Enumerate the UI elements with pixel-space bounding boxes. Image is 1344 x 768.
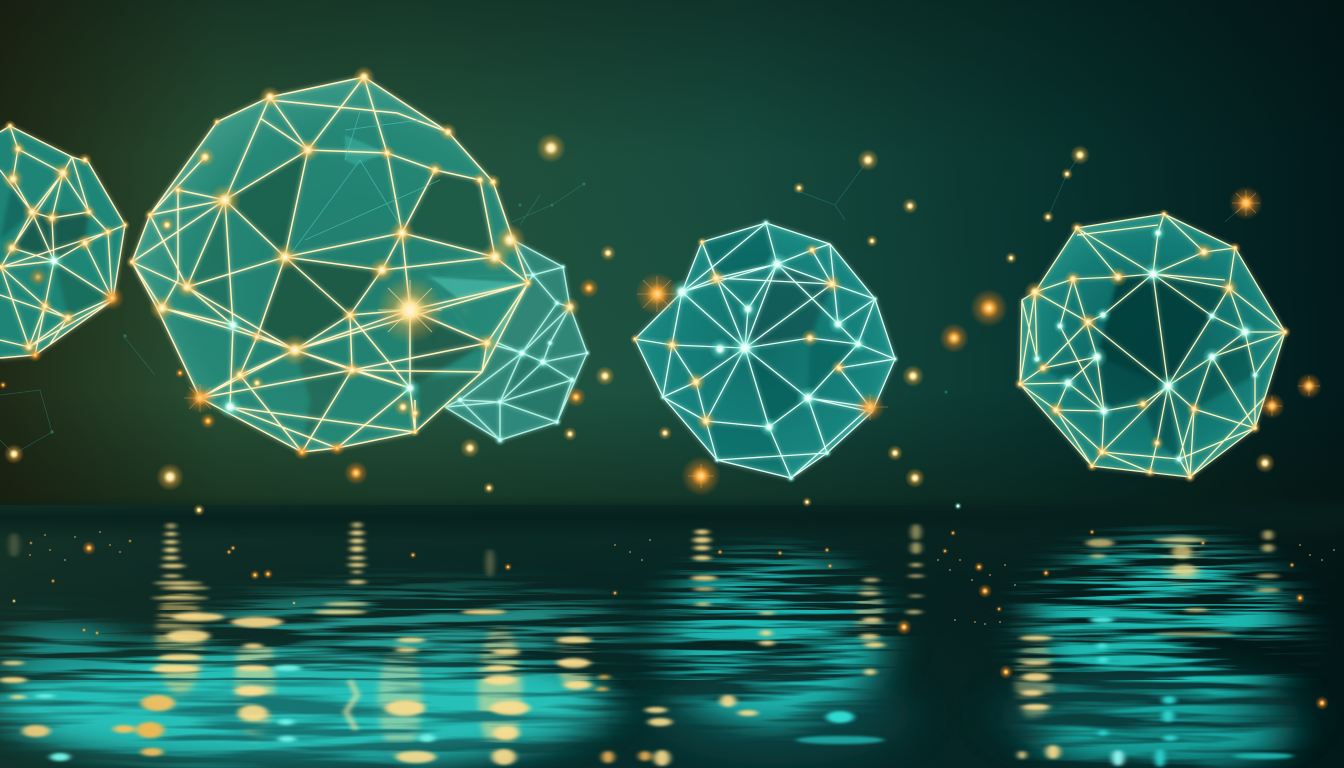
left sphere cut off at edge [0, 120, 130, 362]
large sphere: gold wireframe [126, 66, 534, 460]
gold reflection streaks [0, 522, 1280, 766]
star flare on central node [378, 280, 442, 340]
background: dark teal-green gradient [0, 0, 1344, 520]
glowing nodes of large sphere [126, 66, 534, 460]
sphere behind: pale teal wireframe [421, 233, 591, 446]
dark facets of middle sphere [702, 223, 858, 478]
faint constellation lines [0, 155, 1246, 454]
right sphere: teal-gold wireframe [1014, 209, 1291, 483]
orange specks floating above water [12, 504, 1335, 710]
star flares on bright particles [184, 190, 1320, 488]
dark facets of large sphere [187, 150, 495, 452]
bright teal glints on water [35, 617, 1293, 767]
cyan inner lines of large sphere [290, 112, 440, 255]
floating golden and orange light particles [0, 133, 1322, 510]
middle sphere: teal wireframe [630, 218, 899, 483]
water surface [0, 496, 1344, 768]
water ripples: teal and gold reflected light [0, 535, 1290, 765]
dark facets of right sphere [1043, 274, 1255, 459]
